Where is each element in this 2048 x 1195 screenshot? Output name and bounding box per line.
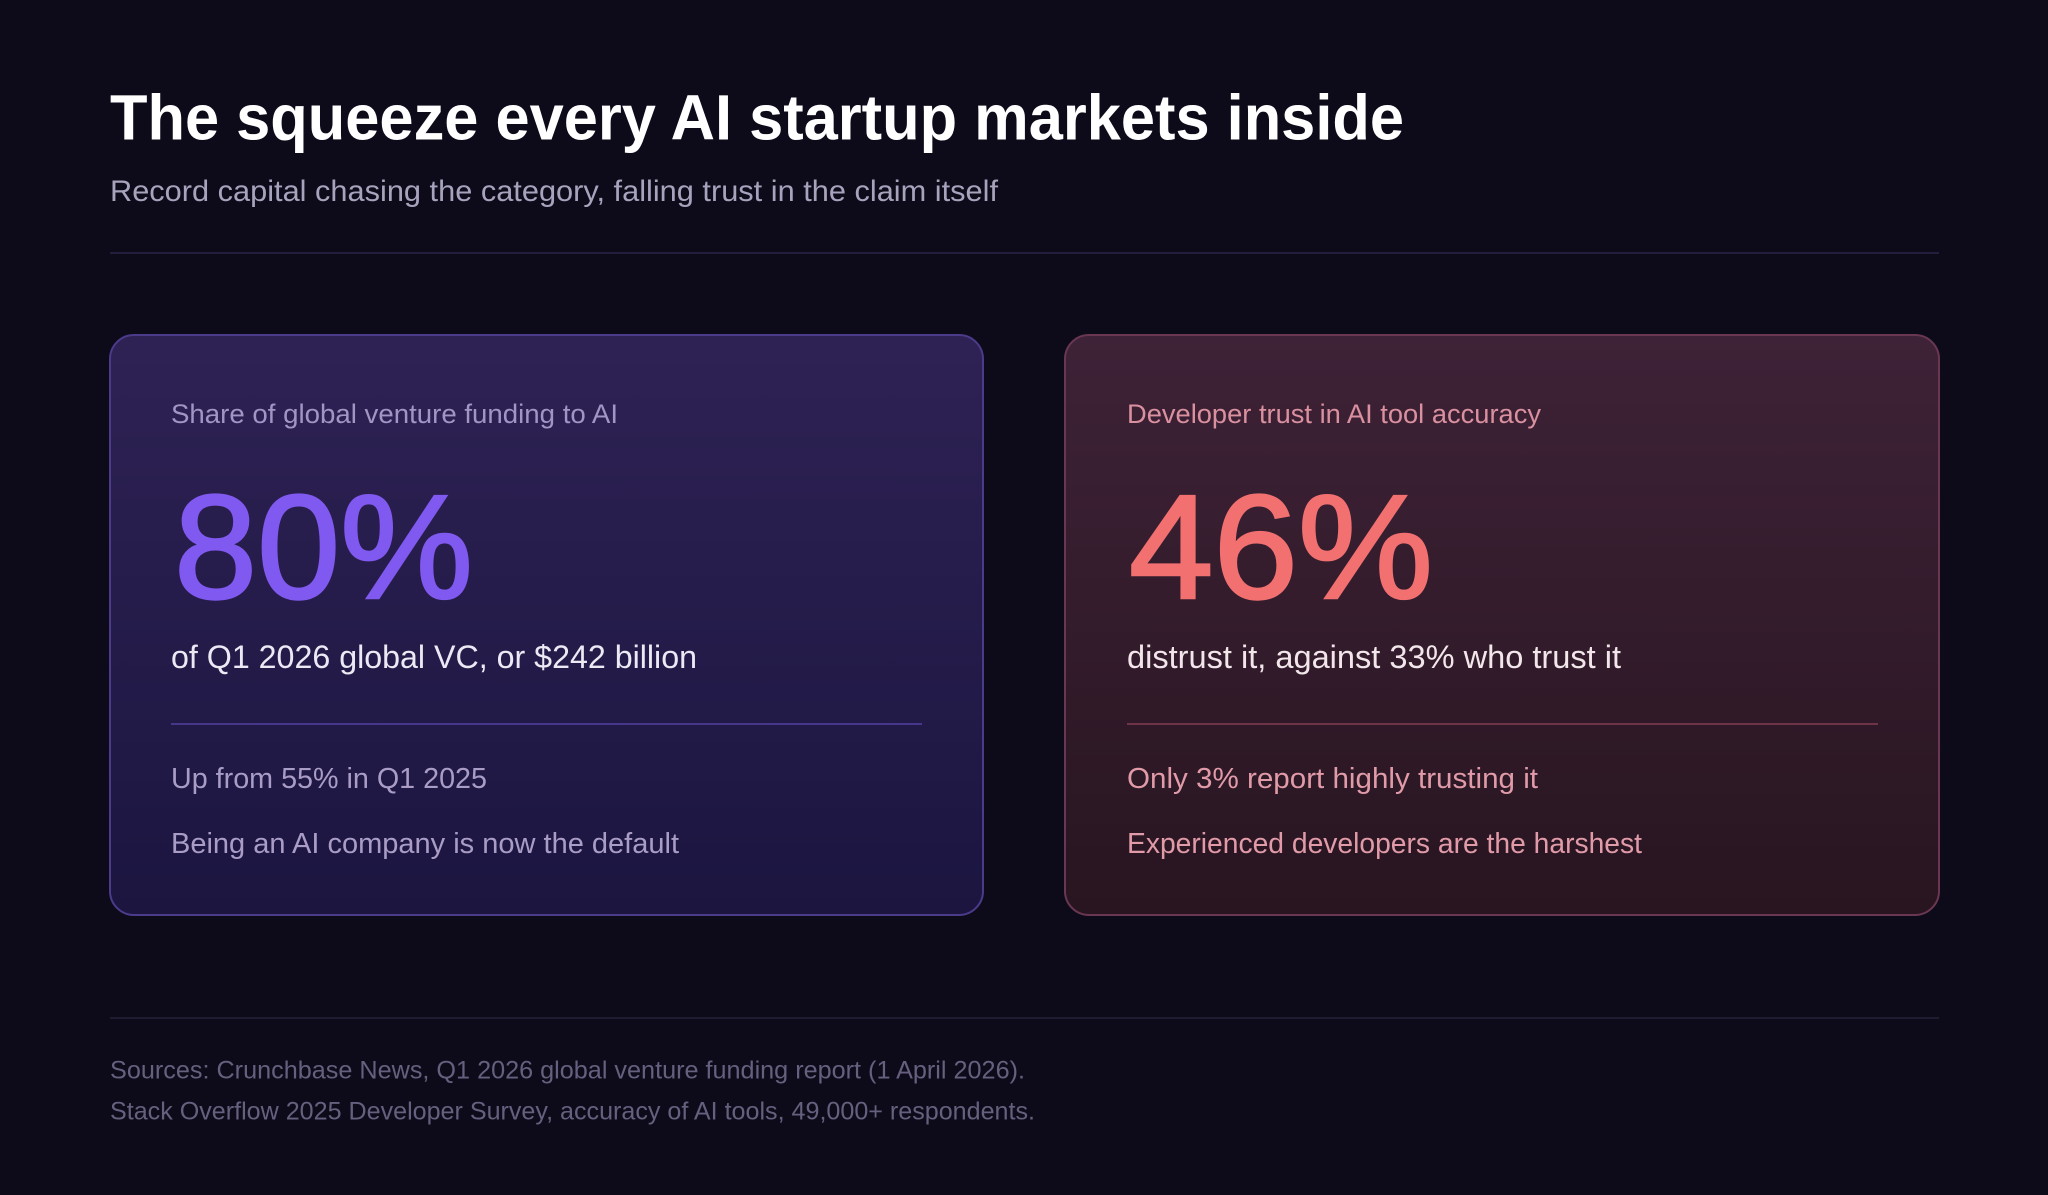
panel: developer trust [1065, 335, 1939, 915]
detail line: default: Being an AI company is now the default [171, 828, 679, 860]
panel label: Share of global venture funding to AI [171, 399, 618, 429]
big stat: 80%: 80% [174, 465, 473, 630]
detail line: year-over-year: Up from 55% in Q1 2025 [171, 763, 487, 795]
detail line: experienced developers: Experienced developers are the harshest [1127, 828, 1642, 860]
sources footer: Sources: Crunchbase News, Q1 2026 global venture funding report (1 April 2026). [110, 1056, 1025, 1084]
panel label: Developer trust in AI tool accuracy [1127, 399, 1541, 429]
detail line: high trust: Only 3% report highly trusting it [1127, 763, 1538, 795]
stat description: distrust it, against 33% who trust it [1127, 639, 1621, 675]
sources footer: Stack Overflow 2025 Developer Survey, accuracy of AI tools, 49,000+ respondents. [110, 1098, 1035, 1126]
subtitle: Record capital chasing the category, falling trust in the claim itself [110, 175, 999, 208]
sources footer [110, 1056, 1035, 1126]
header [110, 82, 1404, 208]
title: The squeeze every AI startup markets inside [110, 82, 1404, 154]
stat description: of Q1 2026 global VC, or $242 billion [171, 639, 697, 675]
panel: AI venture funding share [110, 335, 983, 915]
big stat: 46%: 46% [1129, 465, 1433, 630]
